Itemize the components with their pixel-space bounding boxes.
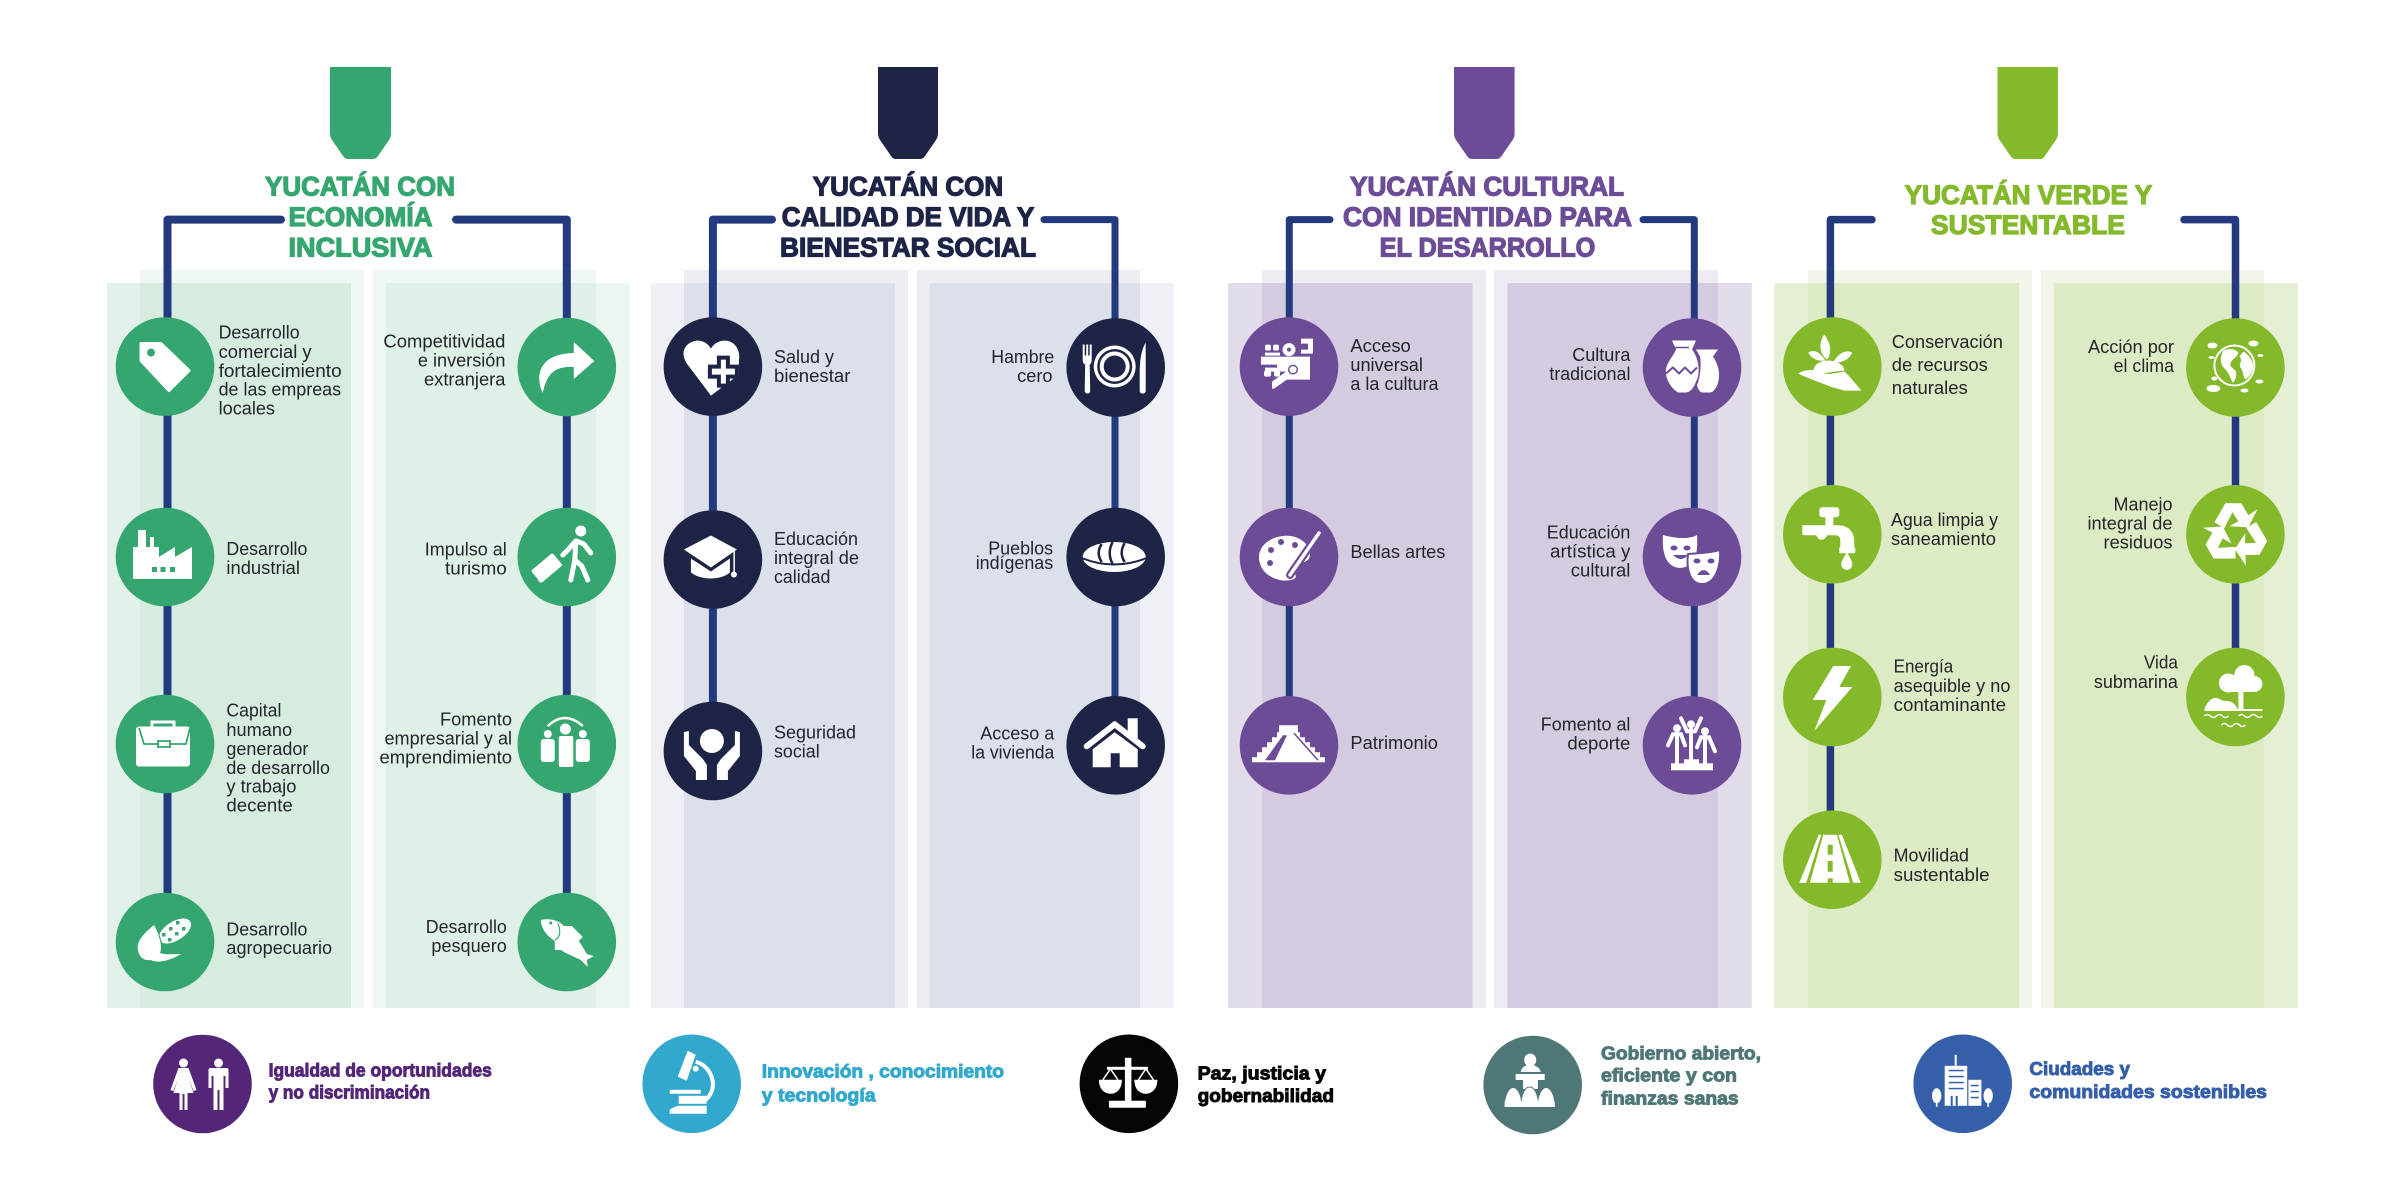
node: Manejo integral de residuos [2088, 485, 2285, 584]
label [1894, 657, 2010, 715]
icon: food [1082, 542, 1147, 572]
label: industrial [226, 558, 300, 578]
label [1892, 332, 2003, 398]
label [226, 920, 332, 958]
label [1547, 523, 1630, 580]
label: y tecnología [762, 1086, 877, 1106]
panel: left column background [1228, 270, 1486, 1008]
label: gobernabilidad [1198, 1086, 1334, 1106]
node: Impulso al turismo [425, 508, 616, 606]
icon: price tag [141, 344, 189, 391]
label: saneamiento [1891, 529, 1996, 549]
node: Energía asequible [1783, 648, 2010, 746]
section: Yucatán con economía inclusiva [107, 67, 630, 1008]
label [219, 323, 342, 419]
label: Bellas artes [1350, 542, 1445, 562]
label: Manejo [2114, 495, 2172, 515]
label [426, 917, 507, 956]
label: decente [226, 796, 293, 816]
node: Bellas artes [1240, 508, 1445, 606]
cross-cutting: Innovación, conocimiento y tecnología [642, 1034, 1004, 1133]
heading [780, 172, 1036, 262]
label [991, 347, 1054, 386]
label: sustentable [1894, 865, 1990, 885]
label: Seguridad [774, 722, 856, 742]
icon: pyramid [1252, 725, 1325, 762]
label: Conservación [1892, 332, 2003, 352]
shield tab [1454, 67, 1515, 159]
label: universal [1350, 355, 1423, 375]
icon: speaker and audience [1505, 1054, 1555, 1107]
label: calidad [774, 567, 830, 587]
label: extranjera [424, 369, 506, 389]
label: Paz, justicia y [1198, 1063, 1326, 1083]
label: Acceso [1350, 336, 1411, 356]
label: pesquero [431, 936, 507, 956]
label [383, 332, 506, 389]
connector: left branch [713, 220, 772, 751]
label: emprendimiento [380, 747, 512, 767]
node: Agua limpia y saneamiento [1783, 485, 1998, 584]
icon: globe and clouds [2206, 340, 2263, 392]
node: Fomento empresarial [380, 695, 616, 793]
node: Pueblos indígenas [976, 508, 1165, 606]
label [1541, 715, 1630, 754]
connector: right branch [1643, 220, 1694, 745]
label: a la cultura [1350, 374, 1440, 394]
label: social [774, 742, 820, 762]
connector: right branch [2184, 220, 2236, 697]
label [2029, 1059, 2267, 1102]
label: eficiente y con [1601, 1066, 1737, 1086]
label [1601, 1043, 1761, 1109]
label: artística y [1550, 542, 1630, 562]
icon: cultural glyph [1261, 339, 1313, 389]
section: Yucatán con calidad de vida y bienestar social [651, 67, 1174, 1008]
cross-cutting: Gobierno abierto [1483, 1036, 1761, 1134]
shield tab [1998, 67, 2058, 159]
label: Gobierno abierto, [1601, 1043, 1761, 1063]
label: comercial y [219, 342, 312, 362]
label: cero [1017, 366, 1052, 386]
icon: tree and water [2204, 665, 2262, 726]
heading [265, 172, 455, 262]
label [774, 529, 859, 587]
label [425, 539, 507, 578]
section: Yucatán cultural con identidad para el desarrollo [1228, 67, 1752, 1008]
label: Patrimonio [1350, 733, 1438, 753]
icon: vases [1666, 340, 1719, 392]
label: Fomento al [1541, 715, 1630, 735]
label: Salud y [774, 347, 834, 367]
label: e inversión [418, 350, 505, 370]
section: Yucatán verde y sustentable [1774, 67, 2298, 1008]
icon: house [1087, 718, 1143, 767]
shield tab [330, 67, 391, 159]
node: Hambre cero [991, 318, 1165, 417]
label: Energía [1894, 657, 1954, 677]
label [269, 1060, 492, 1103]
cross-cutting: Igualdad de oportunidades [153, 1035, 492, 1133]
label: naturales [1892, 378, 1968, 398]
label: Innovación , conocimiento [762, 1062, 1004, 1082]
node: Acceso a la vivienda [971, 696, 1165, 795]
label: el clima [2114, 356, 2175, 376]
label: locales [219, 399, 275, 419]
label: Desarrollo [226, 539, 307, 559]
node: Patrimonio [1240, 696, 1438, 795]
icon: recycling [2198, 503, 2273, 569]
label: residuos [2104, 533, 2172, 553]
node: Conservación de recursos naturales [1783, 317, 2003, 416]
label: Movilidad [1894, 846, 1969, 866]
node: Desarrollo agropecuario [116, 893, 332, 991]
label [976, 539, 1053, 573]
label: Desarrollo [426, 917, 507, 937]
label: Desarrollo [226, 920, 307, 940]
label: tradicional [1549, 364, 1630, 384]
label: indígenas [976, 553, 1053, 573]
label: Cultura [1572, 345, 1631, 365]
heading: YUCATÁN CON [265, 172, 455, 202]
icon: corn [138, 913, 195, 962]
label: Ciudades y [2029, 1059, 2130, 1079]
node: Cultura tradicional [1549, 318, 1741, 417]
connector: right branch [456, 220, 567, 942]
label [380, 710, 512, 767]
panel: right column background [2041, 270, 2298, 1008]
node: Salud y bienestar [664, 317, 850, 416]
panel: left column background [1774, 270, 2032, 1008]
node: Seguridad social [664, 702, 856, 800]
label: la vivienda [971, 743, 1055, 763]
panel: right column background [372, 270, 630, 1008]
icon: palette [1259, 533, 1319, 581]
label [1894, 846, 1990, 885]
connector: left branch [168, 220, 281, 942]
label: integral de [2088, 514, 2172, 534]
heading: INCLUSIVA [288, 232, 432, 262]
label [226, 539, 307, 578]
icon: lightning bolt [1813, 666, 1852, 731]
label: Educación [1547, 523, 1630, 543]
label [226, 701, 330, 816]
node: Desarrollo comercial [116, 317, 342, 419]
label [762, 1062, 1004, 1106]
icon: podium [1668, 718, 1715, 770]
node: Vida submarina [2094, 648, 2285, 746]
node: Educación integral [664, 510, 859, 609]
node: Desarrollo industrial [116, 508, 307, 606]
icon: team [541, 718, 590, 767]
label: integral de [774, 548, 859, 568]
label: submarina [2094, 672, 2179, 692]
label [1891, 510, 1998, 549]
heading: CALIDAD DE VIDA Y [782, 202, 1035, 232]
label [971, 723, 1055, 763]
label [2088, 495, 2172, 553]
label [1198, 1063, 1334, 1106]
node: Desarrollo pesquero [426, 893, 616, 991]
connector: right branch [1044, 220, 1115, 745]
label: de las empreas [219, 380, 341, 400]
icon: fish [541, 919, 594, 967]
label: Agua limpia y [1891, 510, 1998, 530]
label: agropecuario [226, 938, 332, 958]
label: Hambre [991, 347, 1054, 367]
label: Impulso al [425, 539, 507, 559]
label [1549, 345, 1631, 384]
icon: road [1799, 835, 1861, 883]
icon: hands holding [684, 729, 740, 780]
label: Igualdad de oportunidades [269, 1060, 492, 1080]
icon: hand with plant [1798, 335, 1861, 391]
label: Vida [2144, 653, 2179, 673]
label: Educación [774, 529, 858, 549]
label: contaminante [1894, 695, 2006, 715]
icon: water tap [1802, 507, 1855, 570]
label [2088, 337, 2175, 376]
icon: heart with cross [684, 341, 739, 396]
heading: YUCATÁN VERDE Y [1905, 180, 2152, 210]
heading: BIENESTAR SOCIAL [780, 232, 1036, 262]
label: finanzas sanas [1601, 1089, 1739, 1109]
label: comunidades sostenibles [2029, 1082, 2267, 1102]
label [774, 347, 850, 386]
label: Acceso a [980, 723, 1055, 743]
label: generador [226, 739, 308, 759]
heading: YUCATÁN CON [813, 172, 1003, 202]
label: cultural [1571, 560, 1630, 580]
heading [1905, 180, 2152, 240]
node: Competitividad [383, 318, 616, 416]
icon: scales [1099, 1058, 1157, 1108]
panel: left column background [651, 270, 908, 1008]
label [774, 722, 856, 762]
label: de desarrollo [226, 758, 330, 778]
connector: left branch [1289, 220, 1330, 745]
node: Movilidad sustentable [1783, 810, 1990, 909]
icon: woman and man [170, 1058, 228, 1110]
label: fortalecimiento [219, 361, 342, 381]
icon: traveller [531, 526, 591, 583]
label: Fomento [440, 710, 512, 730]
heading [1343, 172, 1632, 262]
icon: theatre masks [1663, 535, 1720, 584]
heading: CON IDENTIDAD PARA [1343, 202, 1632, 232]
icon: city [1932, 1055, 1993, 1107]
icon: plate and cutlery [1083, 342, 1146, 394]
label: de recursos [1892, 355, 1988, 375]
icon: microscope [670, 1051, 713, 1114]
label: Capital [226, 701, 281, 721]
node: Capital humano [116, 695, 330, 816]
label: Competitividad [383, 332, 505, 352]
label: asequible y no [1894, 676, 2010, 696]
panel: left column background [107, 270, 364, 1008]
panel: right column background [917, 270, 1174, 1008]
node: Acceso universal a la cultura [1240, 317, 1440, 416]
connector: left branch [1830, 220, 1872, 860]
label: turismo [445, 558, 507, 578]
cross-cutting: Paz, justicia y gobernabilidad [1080, 1034, 1334, 1133]
node: Educación artística [1547, 508, 1741, 606]
label: Desarrollo [219, 323, 300, 343]
label: deporte [1567, 734, 1630, 754]
label [2094, 653, 2179, 692]
label: y trabajo [226, 776, 296, 796]
heading: YUCATÁN CULTURAL [1350, 172, 1624, 202]
icon: graduation cap [684, 536, 737, 578]
shield tab [878, 67, 938, 159]
heading: EL DESARROLLO [1380, 232, 1595, 262]
panel: right column background [1494, 270, 1752, 1008]
icon: arrow [539, 342, 594, 393]
label: Pueblos [988, 539, 1053, 559]
node: Fomento al deporte [1541, 696, 1741, 795]
label: empresarial y al [384, 728, 512, 748]
label: y no discriminación [269, 1083, 430, 1103]
heading: SUSTENTABLE [1931, 210, 2125, 240]
node: Acción por el clima [2088, 318, 2285, 417]
heading: ECONOMÍA [288, 202, 432, 232]
icon: factory [133, 530, 192, 579]
icon: briefcase [136, 722, 190, 766]
label: bienestar [774, 366, 850, 386]
cross-cutting: Ciudades y comunidades sostenibles [1913, 1034, 2267, 1133]
label: Acción por [2088, 337, 2174, 357]
label: humano [226, 720, 292, 740]
label [1350, 336, 1440, 394]
